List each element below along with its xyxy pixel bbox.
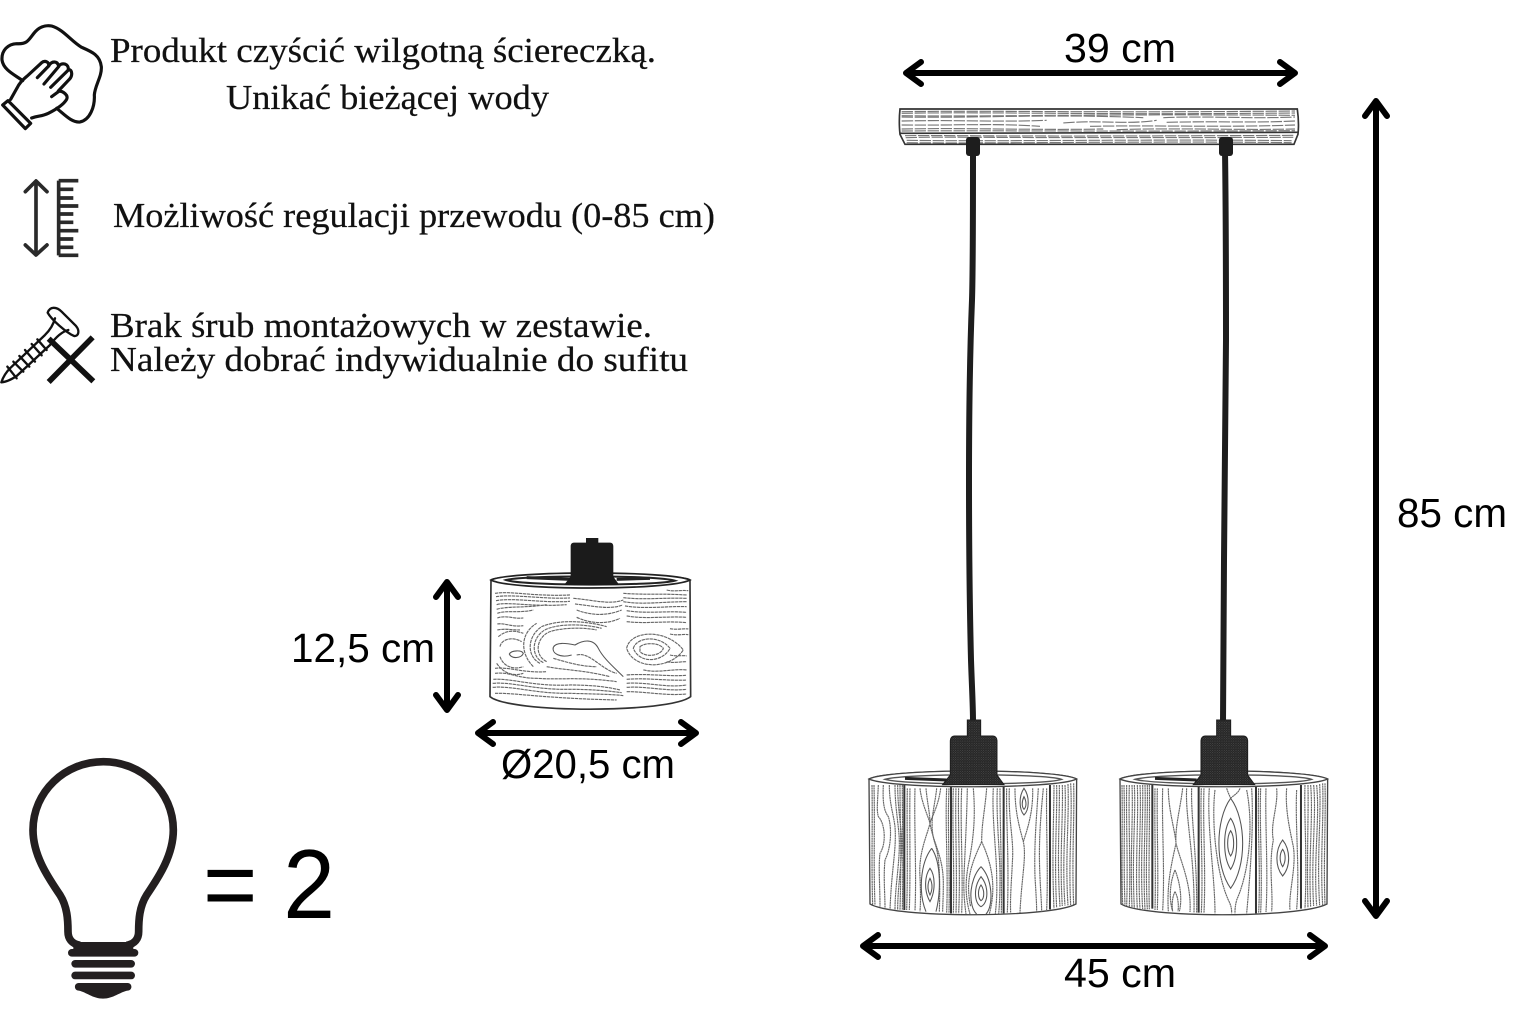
label: 85 cm: 85 cm <box>1397 490 1507 536</box>
wood shade body <box>490 574 691 709</box>
text: mounting screws note: Należy dobrać indywidualnie do sufitu <box>110 340 688 379</box>
label: 39 cm: 39 cm <box>1064 25 1176 71</box>
text: cable adjustment: Możliwość regulacji przewodu (0-85 cm) <box>113 196 715 235</box>
arrow: bar width <box>906 62 1295 84</box>
cords <box>969 150 1226 722</box>
right socket <box>1193 720 1255 785</box>
wood knots <box>497 622 683 677</box>
left socket <box>943 720 1004 785</box>
icon: hand wiping with cloth <box>2 26 101 129</box>
grain left shade <box>872 783 1074 914</box>
text: mounting screws note <box>110 306 688 379</box>
arrow: total width <box>863 935 1325 957</box>
pendant lamp assembly <box>869 109 1328 915</box>
label: diameter 20,5 cm: Ø20,5 cm <box>501 741 675 787</box>
icon: light bulb <box>33 762 173 999</box>
plank seams <box>1152 785 1301 913</box>
wooden ceiling bar <box>899 109 1298 144</box>
arrow: shade diameter <box>478 722 696 744</box>
grain right shade <box>1122 783 1325 913</box>
text: bulb count: = 2 <box>203 829 335 939</box>
label: 45 cm: 45 cm <box>1064 950 1176 996</box>
wood grain <box>493 590 688 700</box>
small lamp shade detail <box>490 538 691 709</box>
black socket <box>564 538 619 585</box>
text: cleaning instruction: Produkt czyścić wilgotną ściereczką. <box>110 31 656 70</box>
left shade rim <box>869 771 1077 787</box>
canopy connectors <box>966 137 1233 156</box>
right shade rim <box>1120 771 1328 787</box>
text: mounting screws note: Brak śrub montażowych w zestawie. <box>110 306 652 345</box>
text: cleaning instruction <box>110 31 656 117</box>
arrow: total height <box>1365 101 1387 916</box>
text: cleaning instruction: Unikać bieżącej wody <box>226 78 550 117</box>
icon: height adjustment ruler <box>25 181 78 255</box>
right wooden shade <box>1120 720 1328 915</box>
plank seams <box>904 785 1050 913</box>
label: 12,5 cm: 12,5 cm <box>291 625 435 671</box>
left wooden shade <box>869 720 1077 915</box>
arrow: shade height <box>436 582 458 710</box>
shade top rim <box>491 573 690 588</box>
icon: screw crossed out <box>1 308 93 382</box>
